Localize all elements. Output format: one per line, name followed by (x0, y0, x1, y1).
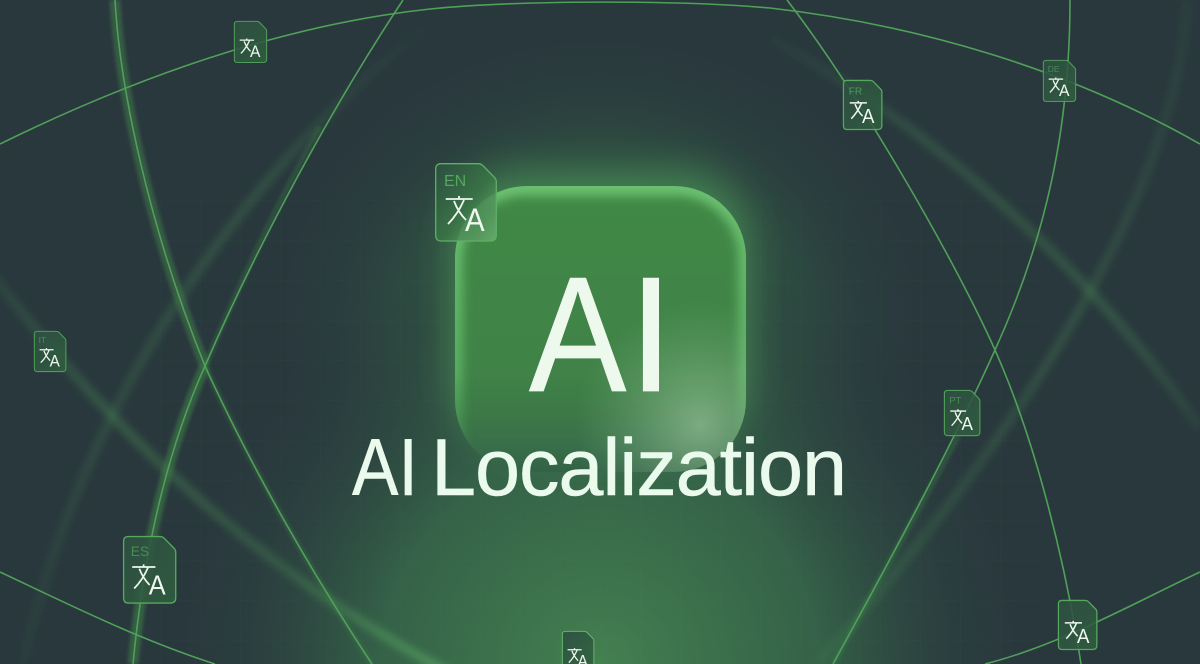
file icon: FR (843, 80, 882, 129)
AI letters (529, 242, 674, 426)
file icon: DE (1043, 60, 1076, 101)
title: AI (352, 423, 418, 513)
file icon: PT (944, 390, 980, 436)
orbit line halos (115, 0, 958, 664)
file icon: EN: A (465, 202, 485, 238)
file icon: FR: A (862, 105, 874, 128)
AI tile (455, 186, 760, 486)
AI letters: A (529, 242, 627, 426)
file icon: PT: PT (949, 395, 961, 405)
file icon: top: A (250, 43, 260, 61)
glyph: translate (446, 196, 473, 224)
file icon: PT: A (962, 413, 973, 434)
file icon: DE: DE (1048, 64, 1060, 74)
file icon: ES: A (149, 570, 166, 601)
file icon: IT: A (50, 353, 60, 371)
file icon: bottom (562, 631, 594, 664)
AI letters: I (628, 243, 674, 426)
file icon: FR: FR (849, 87, 862, 98)
tile glow (450, 170, 751, 450)
file icon: IT (34, 331, 66, 372)
file icon: DE: A (1059, 82, 1069, 100)
file icon: EN: EN (444, 173, 466, 190)
file icon: EN (436, 164, 496, 241)
file icon: ES: ES (131, 544, 149, 559)
title: Localization (431, 423, 847, 513)
file icon: IT: IT (39, 335, 46, 345)
file icon: bottom right (1058, 600, 1097, 649)
file icon: top (234, 21, 267, 62)
file icon: bottom right: A (1077, 625, 1089, 648)
file icon: ES (124, 537, 176, 603)
